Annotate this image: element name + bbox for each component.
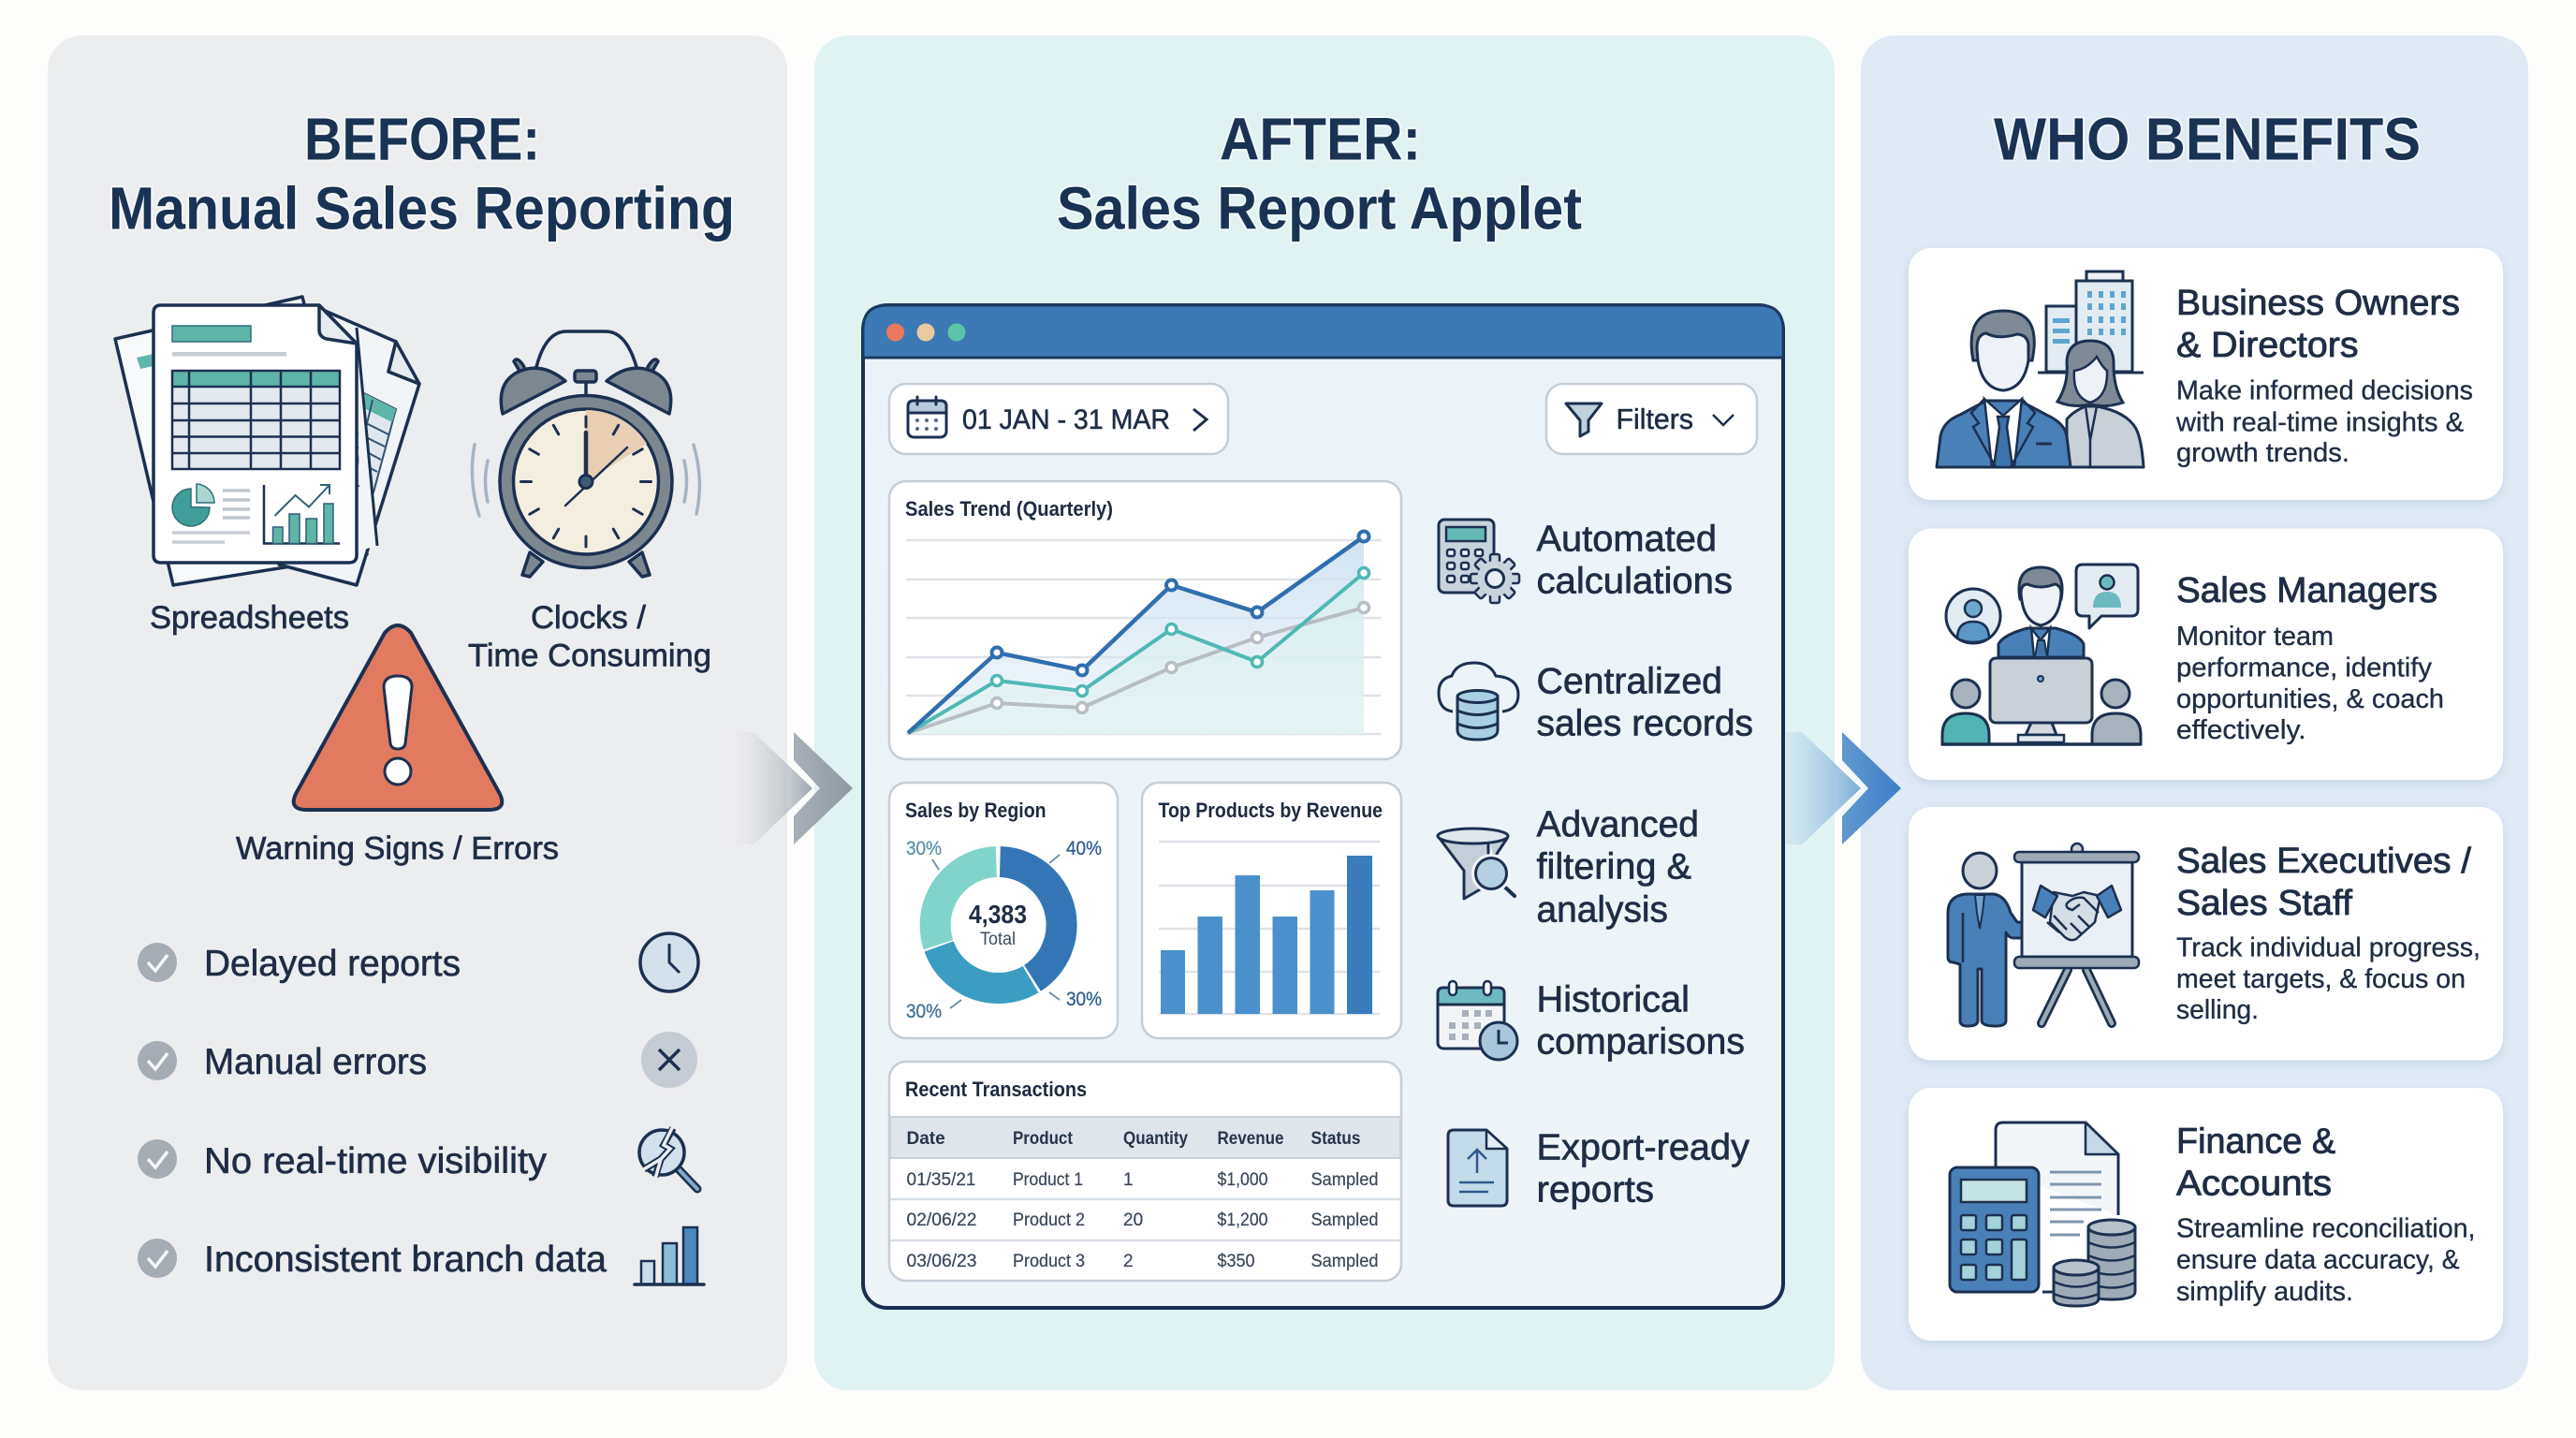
list item: manual errors: Manual errors — [204, 1042, 427, 1082]
title: who benefits: WHO BENEFITS — [1994, 105, 2421, 172]
table: recent transactions: Sampled — [1310, 1211, 1378, 1230]
panel: before — [48, 36, 787, 1390]
feature: automated calculations: Automated — [1537, 519, 1717, 560]
icon: calculator with gear — [1439, 520, 1519, 603]
label: clocks: Clocks / — [531, 600, 647, 636]
table: recent transactions: $350 — [1217, 1252, 1254, 1271]
label: spreadsheets: Spreadsheets — [150, 600, 349, 636]
bar chart: top products: Top Products by Revenue — [1159, 799, 1383, 822]
feature: advanced filtering and analysis: analysis — [1537, 889, 1668, 931]
table: recent transactions: Product — [1013, 1129, 1074, 1149]
card: business owners and directors — [1909, 248, 2503, 500]
table: recent transactions: 01/35/21 — [906, 1170, 975, 1190]
feature: export-ready reports: reports — [1537, 1170, 1654, 1210]
feature: historical comparisons: Historical — [1537, 979, 1690, 1020]
list item: inconsistent branch data — [138, 1227, 704, 1284]
label: clocks — [468, 600, 711, 674]
date range selector: 01 JAN - 31 MAR — [962, 404, 1170, 435]
list item: no real-time visibility: No real-time visibility — [204, 1141, 548, 1181]
feature: historical comparisons — [1438, 979, 1745, 1062]
window title bar — [863, 305, 1783, 358]
card: sales executives and staff: Sales Staff — [2176, 884, 2352, 923]
icon: alarm clock — [472, 331, 699, 577]
app window — [863, 305, 1783, 1308]
card: finance and accounts — [1909, 1088, 2503, 1341]
card: sales managers — [1909, 528, 2503, 780]
arrow: after to who benefits — [1786, 732, 1901, 844]
donut chart: sales by region — [889, 783, 1118, 1038]
icon: uneven bars — [635, 1227, 704, 1284]
table: recent transactions: Quantity — [1123, 1129, 1188, 1149]
icon: broken magnifier — [639, 1126, 697, 1189]
title: before: Manual Sales Reporting — [109, 174, 735, 242]
donut chart: sales by region: 4,383 — [969, 900, 1027, 929]
card: sales managers: effectively. — [2176, 715, 2306, 745]
icon: business people and buildings — [1937, 271, 2144, 467]
icon: export file — [1448, 1130, 1507, 1206]
card: sales executives and staff — [1909, 807, 2503, 1060]
table: recent transactions: $1,200 — [1217, 1211, 1267, 1230]
table: recent transactions: $1,000 — [1217, 1170, 1267, 1190]
card: business owners and directors: & Directors — [2176, 326, 2359, 365]
bar chart: top products — [1142, 783, 1401, 1038]
feature: advanced filtering and analysis: filtering & — [1537, 846, 1691, 888]
donut chart: sales by region: 30% — [906, 838, 942, 859]
table: recent transactions: 03/06/23 — [906, 1252, 977, 1271]
card: sales executives and staff: meet targets, & focus on — [2176, 964, 2466, 994]
card: finance and accounts: Streamline reconciliation, — [2176, 1213, 2475, 1243]
card: sales managers: performance, identify — [2176, 653, 2432, 683]
card: sales executives and staff: Track individual progress, — [2176, 932, 2481, 962]
title: after: Sales Report Applet — [1057, 174, 1582, 242]
card: business owners and directors: Make informed decisions — [2176, 376, 2473, 406]
title: before — [109, 105, 735, 242]
feature: historical comparisons: comparisons — [1537, 1022, 1745, 1062]
feature: centralized sales records: Centralized — [1537, 661, 1722, 702]
feature: automated calculations: calculations — [1537, 562, 1733, 601]
icon: presenter with handshake board — [1948, 844, 2139, 1026]
table: recent transactions: 1 — [1123, 1170, 1134, 1190]
icon: funnel with magnifier — [1438, 829, 1515, 899]
title: before: BEFORE: — [304, 105, 540, 172]
list item: inconsistent branch data: Inconsistent branch data — [204, 1240, 607, 1280]
icon: calendar with clock — [1438, 981, 1517, 1060]
table: recent transactions: Product 1 — [1013, 1170, 1083, 1190]
feature: advanced filtering and analysis — [1438, 805, 1699, 931]
table: recent transactions: Product 2 — [1013, 1211, 1085, 1230]
icon: calendar — [908, 397, 946, 437]
table: recent transactions: 20 — [1123, 1211, 1143, 1230]
donut chart: sales by region: 40% — [1066, 838, 1102, 859]
feature: centralized sales records: sales records — [1537, 704, 1753, 743]
panel: who benefits — [1861, 36, 2528, 1390]
list item: delayed reports: Delayed reports — [204, 944, 461, 984]
table: recent transactions: Revenue — [1217, 1129, 1284, 1149]
woman — [2057, 341, 2144, 467]
card: sales managers: Monitor team — [2176, 622, 2334, 652]
table: recent transactions: Product 3 — [1013, 1252, 1085, 1271]
table: recent transactions: Sampled — [1310, 1170, 1378, 1190]
line chart: sales trend: Sales Trend (Quarterly) — [905, 497, 1113, 521]
line chart: sales trend — [889, 481, 1401, 759]
donut chart: sales by region: Sales by Region — [905, 799, 1046, 822]
icon: clock — [640, 933, 698, 991]
table: recent transactions: Status — [1310, 1129, 1361, 1149]
icon: x mark — [641, 1032, 697, 1088]
table: recent transactions: Date — [906, 1129, 945, 1149]
icon: manager with team — [1941, 565, 2141, 744]
icon: warning triangle — [294, 625, 502, 810]
table: recent transactions: 02/06/22 — [906, 1211, 977, 1230]
panel: after — [814, 36, 1835, 1390]
feature: export-ready reports: Export-ready — [1537, 1127, 1750, 1168]
table: recent transactions — [889, 1062, 1401, 1281]
icon: spreadsheets — [115, 297, 419, 585]
card: sales managers: opportunities, & coach — [2176, 684, 2444, 714]
card: business owners and directors: Business Owners — [2176, 284, 2460, 323]
card: business owners and directors: with real-time insights & — [2175, 408, 2464, 438]
card: finance and accounts: Accounts — [2176, 1165, 2332, 1204]
list item: no real-time visibility — [138, 1126, 697, 1189]
list item: delayed reports — [138, 933, 698, 991]
table: recent transactions: Recent Transactions — [905, 1078, 1087, 1101]
date range selector — [889, 384, 1228, 454]
label: clocks: Time Consuming — [468, 638, 711, 674]
feature: export-ready reports — [1448, 1127, 1750, 1210]
donut chart: sales by region: Total — [980, 930, 1016, 949]
card: sales executives and staff: selling. — [2176, 995, 2259, 1025]
card: finance and accounts: Finance & — [2176, 1122, 2335, 1161]
man — [1937, 311, 2071, 467]
feature: automated calculations — [1439, 519, 1733, 603]
icon: cloud database — [1439, 663, 1518, 740]
card: finance and accounts: simplify audits. — [2176, 1277, 2353, 1307]
donut chart: sales by region: 30% — [1066, 989, 1102, 1010]
feature: centralized sales records — [1439, 661, 1753, 743]
donut chart: sales by region: 30% — [906, 1001, 942, 1022]
arrow: before to after — [730, 732, 853, 844]
card: business owners and directors: growth trends. — [2176, 438, 2349, 468]
table: recent transactions: Sampled — [1310, 1252, 1378, 1271]
title: after — [1057, 105, 1582, 242]
label: warning signs: Warning Signs / Errors — [236, 831, 559, 867]
feature: advanced filtering and analysis: Advanced — [1537, 805, 1699, 844]
card: sales managers: Sales Managers — [2176, 571, 2437, 610]
card: finance and accounts: ensure data accuracy, & — [2176, 1245, 2460, 1275]
icon: calculator, document and coins — [1950, 1123, 2135, 1306]
filters button — [1546, 384, 1757, 454]
filters button: Filters — [1616, 403, 1693, 435]
table: recent transactions: 2 — [1123, 1252, 1134, 1271]
title: after: AFTER: — [1220, 105, 1421, 172]
list item: manual errors — [138, 1032, 697, 1088]
card: sales executives and staff: Sales Executives / — [2176, 842, 2471, 881]
